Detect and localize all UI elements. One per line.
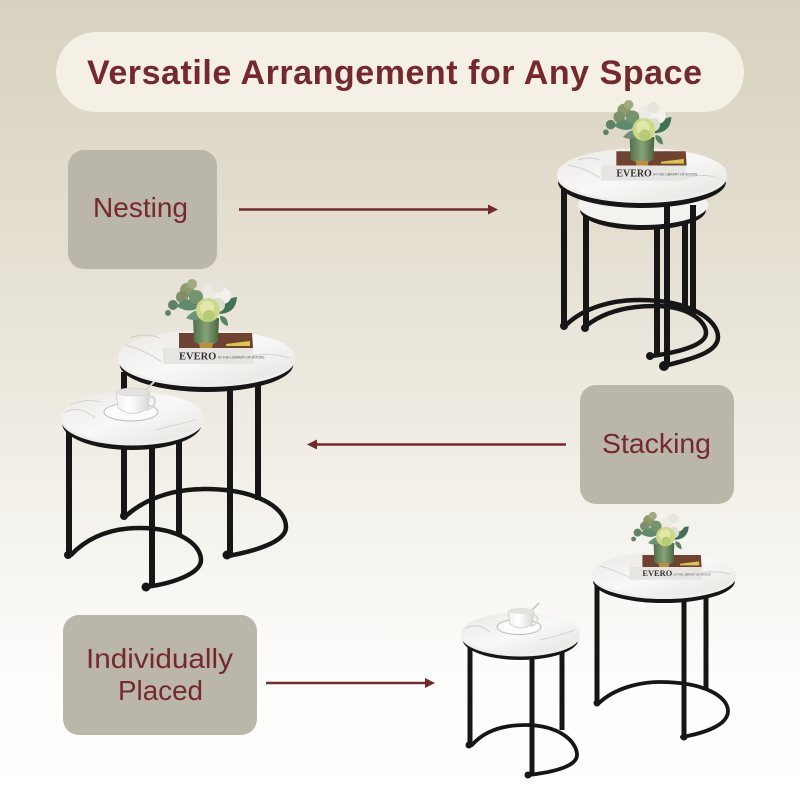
small marble top bbox=[461, 612, 580, 660]
small marble top bbox=[61, 392, 204, 450]
label: Individually Placed: Placed bbox=[118, 675, 203, 706]
title banner bbox=[56, 32, 744, 112]
arrow: nesting to table bbox=[239, 204, 498, 214]
large marble top bbox=[592, 552, 736, 603]
book and bouquet: EVERO bbox=[642, 569, 673, 578]
book and bouquet: IN THE LIBRARY OF BOOKS bbox=[674, 572, 711, 576]
label: Individually Placed bbox=[63, 615, 257, 735]
label: Stacking bbox=[580, 385, 734, 504]
book and bouquet bbox=[601, 100, 698, 181]
label: Nesting: Nesting bbox=[93, 192, 188, 223]
small table frame bbox=[466, 642, 577, 778]
book and bouquet bbox=[163, 279, 265, 364]
arrow: stacking to table bbox=[307, 440, 566, 450]
label: Individually Placed: Individually bbox=[86, 643, 233, 674]
large marble top bbox=[118, 330, 295, 392]
large table frame bbox=[120, 372, 286, 560]
book and bouquet: IN THE LIBRARY OF BOOKS bbox=[653, 172, 698, 176]
product: tables placed separately bbox=[461, 512, 736, 778]
small table frame bbox=[64, 432, 201, 592]
arrow: individually placed to tables bbox=[266, 678, 435, 688]
nested small table frame bbox=[578, 185, 708, 360]
book and bouquet: EVERO bbox=[179, 352, 216, 362]
large table frame bbox=[594, 585, 728, 740]
cup and saucer bbox=[104, 381, 158, 421]
book and bouquet bbox=[630, 512, 711, 580]
product: stacked arrangement bbox=[61, 279, 295, 592]
label: Stacking: Stacking bbox=[602, 428, 711, 459]
cup and saucer bbox=[497, 603, 541, 634]
title banner: Versatile Arrangement for Any Space bbox=[87, 54, 702, 92]
book and bouquet: EVERO bbox=[616, 168, 652, 179]
book and bouquet: IN THE LIBRARY OF BOOKS bbox=[218, 356, 265, 360]
large table frame bbox=[560, 186, 718, 371]
large marble top bbox=[557, 148, 727, 208]
product: nested tables bbox=[557, 100, 727, 371]
label: Nesting bbox=[68, 150, 217, 269]
